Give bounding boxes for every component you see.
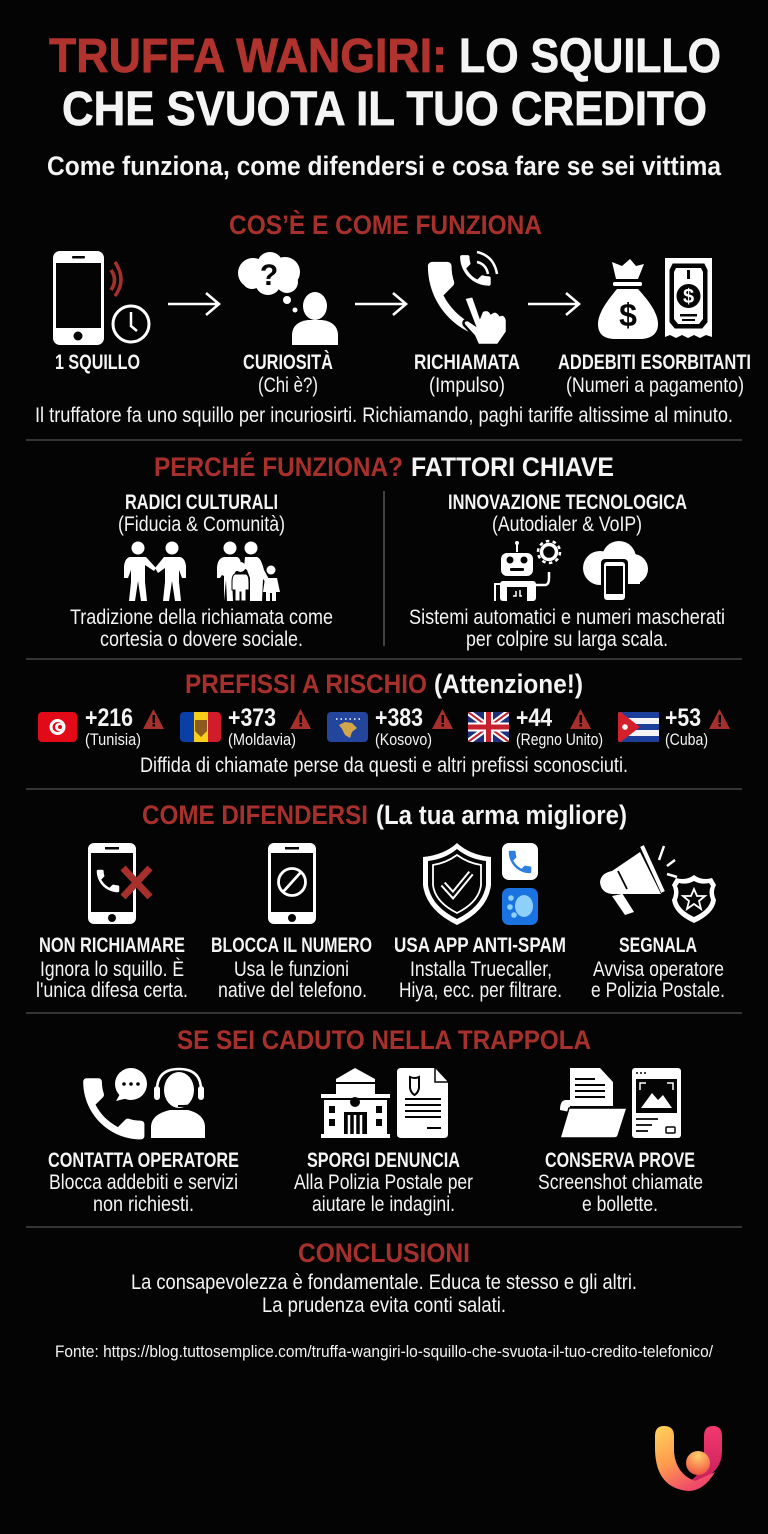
text: usa app anti-spam: USA APP ANTI-SPAM bbox=[394, 934, 566, 957]
icon: phone with red X bbox=[88, 843, 150, 924]
column labels left: RADICI CULTURALI bbox=[125, 491, 278, 514]
icon: blocked phone bbox=[268, 843, 316, 924]
source: Fonte: https://blog.tuttosemplice.com/truffa-wangiri-lo-squillo-che-svuota-il-tuo-credito-telefonico/ bbox=[55, 1342, 713, 1361]
text: segnala bbox=[591, 934, 725, 1002]
step labels: CURIOSITÀ bbox=[243, 351, 333, 374]
icon: warning bbox=[290, 709, 311, 729]
title bbox=[49, 30, 721, 136]
text: non richiamare: Ignora lo squillo. È bbox=[40, 958, 184, 981]
step labels: (Chi è?) bbox=[258, 374, 318, 397]
column description right: per colpire su larga scala. bbox=[466, 628, 668, 651]
text: blocca il numero: native del telefono. bbox=[218, 979, 367, 1002]
icon: phone and operator bbox=[83, 1068, 205, 1139]
item: +373: (Moldavia) bbox=[228, 731, 296, 749]
icon: money bag and bill: $ bbox=[683, 286, 694, 308]
column labels left: (Fiducia & Comunità) bbox=[118, 513, 285, 536]
arrow bbox=[355, 293, 406, 315]
text: blocca il numero: Usa le funzioni bbox=[234, 958, 349, 981]
text: contatta operatore bbox=[48, 1149, 239, 1216]
conclusion text bbox=[131, 1271, 637, 1317]
item: +53: (Cuba) bbox=[665, 731, 708, 749]
item: +216: (Tunisia) bbox=[85, 731, 141, 749]
heading: PERCHÉ FUNZIONA? bbox=[154, 451, 403, 482]
icon: family bbox=[217, 542, 280, 601]
text: contatta operatore: CONTATTA OPERATORE bbox=[48, 1149, 239, 1172]
text: blocca il numero bbox=[211, 934, 372, 1002]
item: +373: +373 bbox=[228, 704, 276, 732]
column labels right: INNOVAZIONE TECNOLOGICA bbox=[448, 491, 687, 514]
icon: phone ringing with clock bbox=[53, 251, 149, 345]
heading: CONCLUSIONI bbox=[298, 1238, 470, 1268]
text: non richiamare: NON RICHIAMARE bbox=[39, 934, 185, 957]
panel: prefissi a rischio bbox=[38, 669, 730, 777]
column description right bbox=[409, 606, 725, 651]
item: +216 bbox=[85, 704, 141, 749]
text: sporgi denuncia: Alla Polizia Postale per bbox=[294, 1171, 473, 1194]
icon: money bag and bill: $ bbox=[619, 297, 637, 333]
panel: come funziona bbox=[35, 209, 751, 427]
arrow bbox=[168, 293, 219, 315]
step labels bbox=[55, 351, 751, 397]
heading bbox=[154, 451, 614, 482]
icon: folder and screenshot bbox=[560, 1068, 681, 1138]
step labels: RICHIAMATA bbox=[414, 351, 520, 374]
icon: police station and report bbox=[321, 1068, 448, 1138]
heading: FATTORI CHIAVE bbox=[411, 452, 614, 482]
icon: robot with gear bbox=[495, 541, 560, 601]
icon: cloud with phone bbox=[583, 541, 648, 602]
item: +44: (Regno Unito) bbox=[516, 731, 603, 749]
subtitle: Come funziona, come difendersi e cosa fare se sei vittima bbox=[47, 151, 722, 181]
flag: Cuba bbox=[618, 712, 659, 742]
icon: warning bbox=[432, 709, 453, 729]
icon: warning bbox=[570, 709, 591, 729]
flag: Tunisia bbox=[38, 712, 77, 742]
heading: PREFISSI A RISCHIO bbox=[185, 669, 427, 699]
column description right: Sistemi automatici e numeri mascherati bbox=[409, 606, 725, 629]
icon: call back with hand bbox=[428, 252, 507, 345]
icon: money bag and bill bbox=[598, 258, 712, 339]
text: usa app anti-spam bbox=[394, 934, 566, 1002]
text: sporgi denuncia bbox=[294, 1149, 473, 1216]
text: conserva prove: CONSERVA PROVE bbox=[545, 1149, 695, 1172]
icon: warning bbox=[143, 709, 164, 729]
text: contatta operatore: Blocca addebiti e servizi bbox=[49, 1171, 238, 1194]
note: Diffida di chiamate perse da questi e altri prefissi sconosciuti. bbox=[140, 754, 628, 777]
column labels right: (Autodialer & VoIP) bbox=[492, 513, 642, 536]
text: usa app anti-spam: Hiya, ecc. per filtrare. bbox=[399, 979, 562, 1002]
item: +383: +383 bbox=[375, 704, 423, 732]
column description left bbox=[70, 606, 333, 651]
text: contatta operatore: non richiesti. bbox=[93, 1193, 194, 1216]
heading bbox=[142, 800, 627, 830]
heading: SE SEI CADUTO NELLA TRAPPOLA bbox=[177, 1025, 591, 1055]
icon: handshake bbox=[124, 542, 186, 601]
flag: United Kingdom bbox=[468, 712, 509, 742]
column description left: Tradizione della richiamata come bbox=[70, 606, 333, 629]
item: +383 bbox=[375, 704, 432, 749]
text: usa app anti-spam: Installa Truecaller, bbox=[410, 958, 552, 981]
icon: warning bbox=[709, 709, 730, 729]
heading: COME DIFENDERSI bbox=[142, 800, 368, 830]
icon: shield and apps bbox=[423, 843, 538, 925]
column labels right bbox=[448, 491, 687, 536]
logo bbox=[655, 1426, 722, 1491]
text: conserva prove: e bollette. bbox=[582, 1193, 658, 1216]
flag: Kosovo bbox=[327, 712, 368, 742]
heading: (La tua arma migliore) bbox=[376, 800, 627, 830]
heading: (Attenzione!) bbox=[434, 669, 583, 699]
heading: COS’È E COME FUNZIONA bbox=[229, 209, 542, 240]
icon: megaphone and police badge bbox=[600, 846, 716, 923]
column description left: cortesia o dovere sociale. bbox=[100, 628, 303, 651]
item: +53 bbox=[665, 704, 708, 749]
text: conserva prove bbox=[538, 1149, 703, 1216]
text: segnala: e Polizia Postale. bbox=[591, 979, 725, 1002]
text: non richiamare bbox=[36, 934, 188, 1002]
text: sporgi denuncia: SPORGI DENUNCIA bbox=[307, 1149, 460, 1172]
panel: come difendersi bbox=[36, 800, 725, 1002]
panel: fattori chiave bbox=[70, 451, 725, 651]
step labels: (Impulso) bbox=[429, 374, 505, 397]
title: CHE SVUOTA IL TUO CREDITO bbox=[62, 83, 707, 136]
conclusion text: La consapevolezza è fondamentale. Educa te stesso e gli altri. bbox=[131, 1271, 637, 1294]
heading bbox=[185, 669, 583, 699]
icon: curious person bbox=[238, 252, 338, 345]
text: segnala: SEGNALA bbox=[619, 934, 697, 957]
flag: Moldova bbox=[180, 712, 221, 742]
panel: se sei caduto nella trappola bbox=[48, 1025, 703, 1216]
arrow bbox=[528, 293, 579, 315]
text: segnala: Avvisa operatore bbox=[593, 958, 724, 981]
text: non richiamare: l'unica difesa certa. bbox=[36, 979, 188, 1002]
step labels: 1 SQUILLO bbox=[55, 351, 140, 374]
column labels left bbox=[118, 491, 285, 536]
title: LO SQUILLO bbox=[459, 30, 721, 83]
text: conserva prove: Screenshot chiamate bbox=[538, 1171, 703, 1194]
item: +53: +53 bbox=[665, 704, 701, 732]
item: +373 bbox=[228, 704, 296, 749]
title: TRUFFA WANGIRI: bbox=[49, 30, 447, 83]
item: +44: +44 bbox=[516, 704, 552, 732]
panel: conclusioni bbox=[131, 1238, 637, 1317]
item: +383: (Kosovo) bbox=[375, 731, 432, 749]
conclusion text: La prudenza evita conti salati. bbox=[262, 1294, 506, 1317]
item: +44 bbox=[516, 704, 603, 749]
text: sporgi denuncia: aiutare le indagini. bbox=[312, 1193, 455, 1216]
text: blocca il numero: BLOCCA IL NUMERO bbox=[211, 934, 372, 957]
item: +216: +216 bbox=[85, 704, 133, 732]
icon: curious person: ? bbox=[260, 259, 278, 292]
